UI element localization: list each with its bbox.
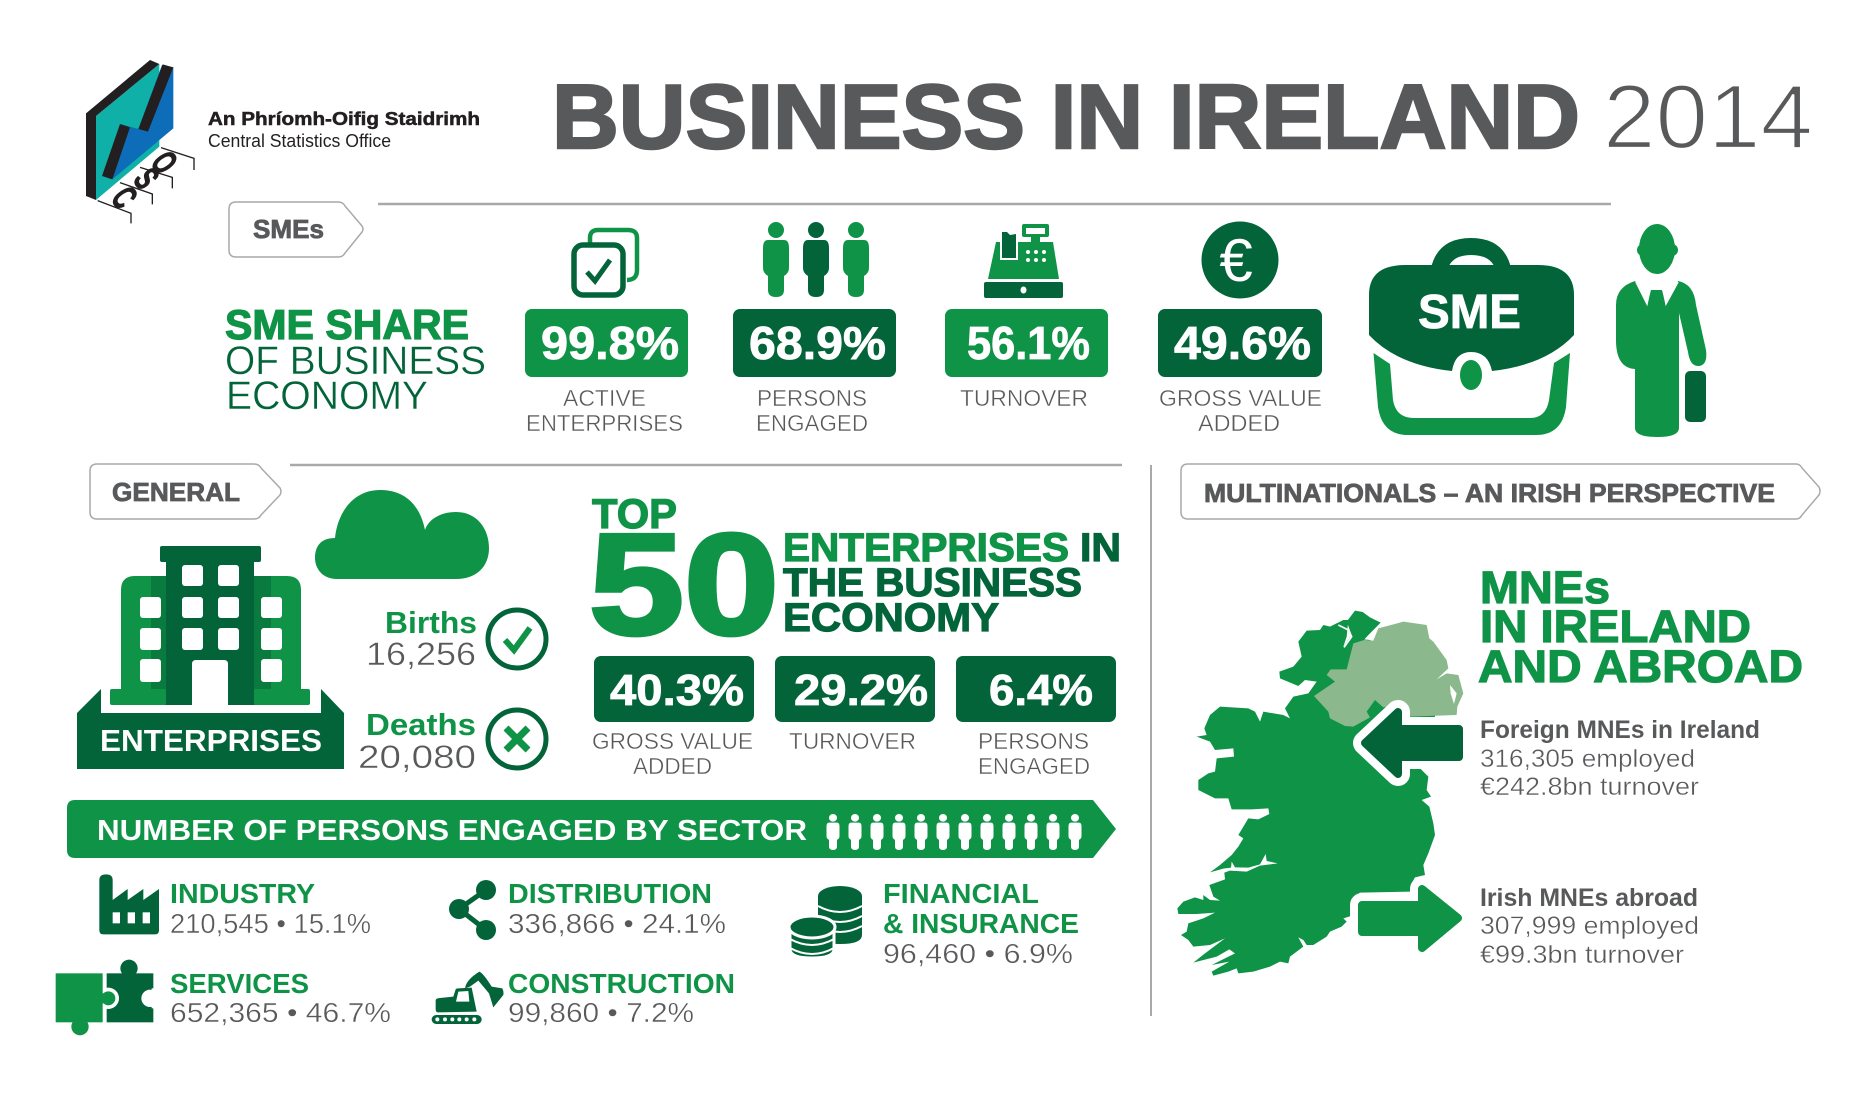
stat: 99.8% active enterprises: ACTIVE xyxy=(563,385,646,411)
heading: SME share of business economy: ECONOMY xyxy=(226,374,428,418)
tag: SMEs: SMEs xyxy=(253,214,324,244)
heading: top 50 enterprises: THE BUSINESS xyxy=(783,561,1082,605)
stat: 6.4% persons engaged: PERSONS xyxy=(978,728,1089,754)
stat: 29.2% turnover xyxy=(775,656,935,754)
heading: top 50 enterprises: TOP xyxy=(592,490,677,537)
logo: CSO: C xyxy=(103,180,145,216)
stat: 99.8% active enterprises xyxy=(525,309,688,436)
icon: SME briefcase: SME xyxy=(1418,286,1521,339)
stat: 40.3% gross value added: GROSS VALUE xyxy=(592,728,753,754)
heading: MNEs in Ireland and abroad xyxy=(1478,562,1803,692)
stat: 49.6% gross value added: 49.6% xyxy=(1174,317,1311,369)
heading: MNEs in Ireland and abroad: IN IRELAND xyxy=(1480,601,1751,652)
sector: industry xyxy=(99,874,371,939)
stat: 56.1% turnover: 56.1% xyxy=(967,317,1090,369)
icon: cash register xyxy=(984,224,1063,298)
stat: 6.4% persons engaged xyxy=(956,656,1116,779)
logo: CSO: S xyxy=(125,161,166,196)
heading: SME share of business economy xyxy=(225,301,486,418)
heading: top 50 enterprises: IN xyxy=(1080,526,1121,570)
icon: three people xyxy=(763,222,869,297)
text: foreign MNEs in Ireland: €242.8bn turnover xyxy=(1480,773,1699,801)
stat: 40.3% gross value added xyxy=(592,656,754,779)
sector: services xyxy=(56,960,391,1035)
stat: 56.1% turnover xyxy=(945,309,1108,411)
sector: distribution: 336,866 • 24.1% xyxy=(508,908,726,939)
stat: 68.9% persons engaged: 68.9% xyxy=(749,317,886,369)
stat: 49.6% gross value added: ADDED xyxy=(1198,410,1280,436)
text: Irish MNEs abroad xyxy=(1480,884,1699,969)
tag: Multinationals: MULTINATIONALS – AN IRISH PERSPECTIVE xyxy=(1204,478,1775,508)
arrow: Irish MNEs abroad xyxy=(1362,889,1458,948)
sector: distribution xyxy=(449,878,726,940)
sector: financial and insurance: & INSURANCE xyxy=(883,908,1079,939)
stat: 29.2% turnover: 29.2% xyxy=(794,666,928,715)
heading: top 50 enterprises: ENTERPRISES xyxy=(783,526,1069,570)
text: Irish MNEs abroad: Irish MNEs abroad xyxy=(1480,884,1698,912)
icon: building with enterprises banner xyxy=(77,546,344,769)
map of Ireland xyxy=(1177,611,1463,976)
stat: 29.2% turnover: TURNOVER xyxy=(789,728,916,754)
text: Irish MNEs abroad: 307,999 employed xyxy=(1480,912,1699,940)
stat: 68.9% persons engaged: ENGAGED xyxy=(756,410,868,436)
organisation name: Central Statistics Office xyxy=(208,131,391,151)
text: foreign MNEs in Ireland xyxy=(1480,716,1760,801)
stat: 56.1% turnover: TURNOVER xyxy=(960,385,1088,411)
births: Births xyxy=(385,605,477,640)
tag: General: GENERAL xyxy=(112,477,240,507)
sector: industry: INDUSTRY xyxy=(170,878,315,909)
deaths: 20,080 xyxy=(358,739,476,775)
sector: industry: 210,545 • 15.1% xyxy=(170,908,371,939)
banner: number of persons engaged by sector xyxy=(67,800,1116,858)
heading: top 50 enterprises: ECONOMY xyxy=(783,596,999,640)
heading: SME share of business economy: SME SHARE xyxy=(225,301,469,348)
title: 2014 xyxy=(1603,67,1813,168)
stat: 99.8% active enterprises: ENTERPRISES xyxy=(526,410,683,436)
icon: building with enterprises banner: ENTERPRISES xyxy=(100,723,322,758)
sector: construction: CONSTRUCTION xyxy=(508,968,735,999)
births xyxy=(366,605,546,672)
sector: construction xyxy=(432,968,735,1028)
sector: construction: 99,860 • 7.2% xyxy=(508,997,694,1028)
heading: top 50 enterprises: 50 xyxy=(589,504,779,665)
deaths: Deaths xyxy=(366,707,476,742)
tag: General xyxy=(90,464,281,519)
text: Irish MNEs abroad: €99.3bn turnover xyxy=(1480,941,1684,969)
stat: 68.9% persons engaged xyxy=(733,309,896,436)
stat: 99.8% active enterprises: 99.8% xyxy=(541,317,679,369)
text: foreign MNEs in Ireland: Foreign MNEs in Ireland xyxy=(1480,716,1760,744)
stat: 40.3% gross value added: ADDED xyxy=(633,753,712,779)
sector: services: 652,365 • 46.7% xyxy=(170,997,391,1028)
sector: financial and insurance xyxy=(789,878,1079,969)
icon: businessman xyxy=(1616,224,1706,437)
icon: SME briefcase xyxy=(1369,238,1574,435)
stat: 6.4% persons engaged: ENGAGED xyxy=(978,753,1090,779)
icon: cloud xyxy=(315,490,489,579)
title: BUSINESS IN IRELAND xyxy=(552,67,1580,168)
organisation name xyxy=(208,109,480,151)
icon: euro: € xyxy=(1219,227,1253,294)
organisation name: An Phríomh-Oifig Staidrimh xyxy=(208,109,480,129)
heading: top 50 enterprises xyxy=(589,490,1121,665)
sector: distribution: DISTRIBUTION xyxy=(508,878,712,909)
births: 16,256 xyxy=(366,636,476,672)
heading: MNEs in Ireland and abroad: MNEs xyxy=(1480,562,1610,613)
stat: 49.6% gross value added xyxy=(1158,309,1322,436)
stat: 40.3% gross value added: 40.3% xyxy=(610,666,744,715)
stat: 68.9% persons engaged: PERSONS xyxy=(757,385,867,411)
icon: euro xyxy=(1202,222,1278,298)
heading: MNEs in Ireland and abroad: AND ABROAD xyxy=(1478,641,1803,692)
banner: number of persons engaged by sector: NUMBER OF PERSONS ENGAGED BY SECTOR xyxy=(97,815,807,847)
arrow: foreign MNEs into Ireland xyxy=(1365,712,1459,774)
logo: CSO: O xyxy=(143,144,185,181)
tag: SMEs xyxy=(229,202,363,257)
sector: financial and insurance: FINANCIAL xyxy=(883,878,1039,909)
sector: services: SERVICES xyxy=(170,968,309,999)
deaths xyxy=(358,707,546,775)
tag: Multinationals xyxy=(1181,464,1820,519)
heading: SME share of business economy: OF BUSINESS xyxy=(225,339,486,383)
stat: 6.4% persons engaged: 6.4% xyxy=(989,666,1093,715)
stat: 49.6% gross value added: GROSS VALUE xyxy=(1159,385,1322,411)
text: foreign MNEs in Ireland: 316,305 employed xyxy=(1480,745,1695,773)
icon: checkbox xyxy=(574,230,637,295)
sector: financial and insurance: 96,460 • 6.9% xyxy=(883,938,1073,969)
logo: CSO xyxy=(86,60,194,223)
